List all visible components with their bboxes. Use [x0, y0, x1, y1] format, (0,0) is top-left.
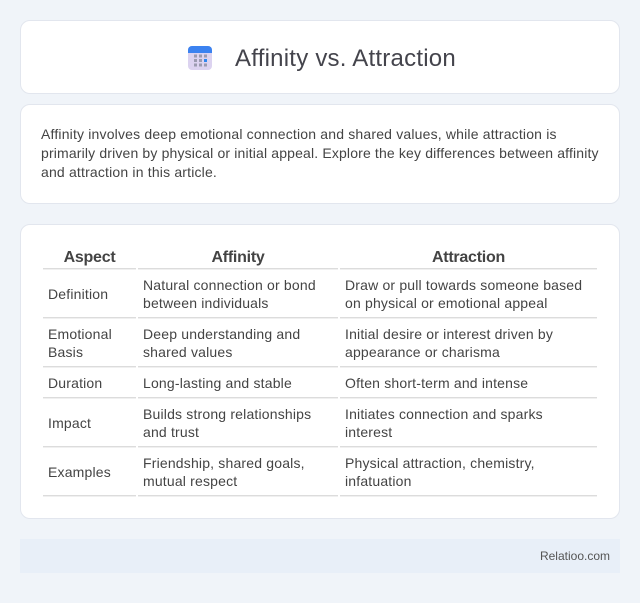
icon: calendar	[188, 46, 212, 70]
footer bar	[20, 539, 620, 573]
table header: Affinity: Affinity	[211, 249, 265, 266]
comparison table panel	[20, 224, 620, 519]
table header: Attraction: Attraction	[432, 249, 505, 266]
row: Duration: Duration	[48, 375, 102, 391]
Duration affinity: Long-lasting and stable	[143, 375, 292, 391]
Definition attraction	[345, 277, 582, 311]
row: Examples: Examples	[48, 464, 111, 480]
Emotional Basis attraction	[345, 326, 553, 360]
Examples affinity: mutual respect	[143, 473, 237, 489]
intro text	[41, 126, 599, 180]
Emotional Basis affinity: shared values	[143, 344, 233, 360]
Impact attraction: Initiates connection and sparks	[345, 406, 543, 422]
Impact affinity: Builds strong relationships	[143, 406, 311, 422]
Emotional Basis affinity	[143, 326, 300, 360]
row: Impact: Impact	[48, 415, 91, 431]
Examples attraction: infatuation	[345, 473, 412, 489]
Emotional Basis attraction: appearance or charisma	[345, 344, 500, 360]
Examples affinity	[143, 455, 305, 489]
Definition affinity: between individuals	[143, 295, 269, 311]
Impact affinity	[143, 406, 311, 440]
Definition affinity	[143, 277, 316, 311]
Definition attraction: Draw or pull towards someone based	[345, 277, 582, 293]
Impact attraction	[345, 406, 543, 440]
Duration attraction: Often short-term and intense	[345, 375, 528, 391]
Examples affinity: Friendship, shared goals,	[143, 455, 305, 471]
Examples attraction: Physical attraction, chemistry,	[345, 455, 535, 471]
intro text: Affinity involves deep emotional connection and shared values, while attraction is	[41, 126, 557, 142]
intro text: and attraction in this article.	[41, 164, 217, 180]
row: Emotional Basis	[48, 326, 112, 360]
table header: Aspect: Aspect	[64, 249, 115, 266]
Impact affinity: and trust	[143, 424, 199, 440]
intro text: primarily driven by physical or initial appeal. Explore the key differences between affinity	[41, 145, 599, 161]
Emotional Basis affinity: Deep understanding and	[143, 326, 300, 342]
intro panel	[20, 104, 620, 204]
row: Definition: Definition	[48, 286, 108, 302]
row: Emotional Basis: Emotional	[48, 326, 112, 342]
Emotional Basis attraction: Initial desire or interest driven by	[345, 326, 553, 342]
Impact attraction: interest	[345, 424, 392, 440]
Examples attraction	[345, 455, 535, 489]
title: Affinity vs. Attraction	[235, 45, 456, 72]
header panel	[20, 20, 620, 94]
Definition attraction: on physical or emotional appeal	[345, 295, 547, 311]
row: Emotional Basis: Basis	[48, 344, 83, 360]
Definition affinity: Natural connection or bond	[143, 277, 316, 293]
footer text: Relatioo.com	[540, 549, 610, 563]
